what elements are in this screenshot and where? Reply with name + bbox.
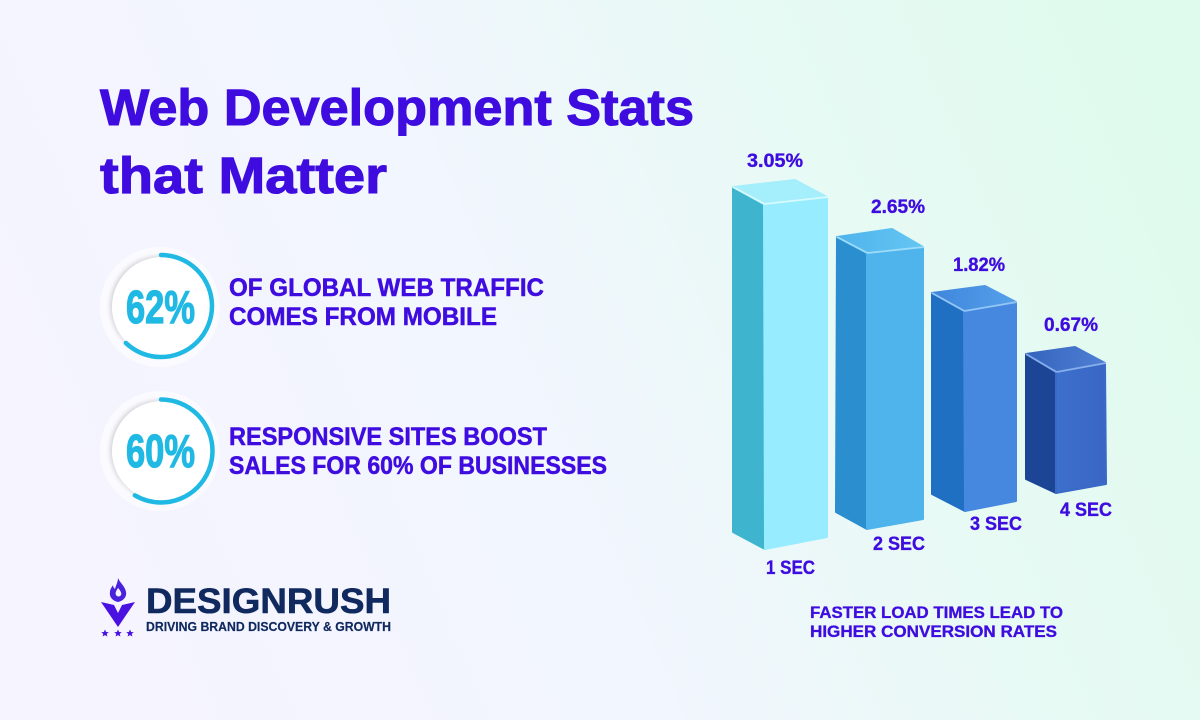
value: 1.82% (953, 255, 1005, 276)
chart caption: HIGHER CONVERSION RATES (810, 622, 1057, 641)
value: 2.65% (871, 197, 925, 218)
axis label: 1 SEC (766, 558, 815, 579)
stat text: RESPONSIVE SITES BOOST (229, 423, 547, 451)
chart caption: FASTER LOAD TIMES LEAD TO (810, 603, 1063, 622)
value: 3.05% (747, 151, 803, 172)
bar: 4 sec (1026, 315, 1112, 521)
donut: 60%: 60% (126, 425, 195, 477)
axis label: 2 SEC (873, 534, 925, 555)
donut: 62% (100, 247, 220, 367)
stat: 60% responsive sites (100, 391, 607, 511)
bar: 2 sec (836, 197, 925, 555)
stat text (229, 274, 544, 331)
chart caption (810, 603, 1063, 641)
bar: 1 sec (733, 151, 828, 579)
stat text (229, 423, 607, 480)
stat text: OF GLOBAL WEB TRAFFIC (229, 274, 544, 302)
icon: flame and V with stars (101, 578, 135, 636)
axis label: 4 SEC (1060, 500, 1112, 521)
tagline: DRIVING BRAND DISCOVERY & GROWTH (146, 620, 391, 634)
stat: 62% mobile traffic (100, 247, 544, 367)
stat text: COMES FROM MOBILE (229, 303, 497, 331)
bar: 3 sec (932, 255, 1022, 535)
value: 0.67% (1044, 315, 1098, 336)
donut: 60% (100, 391, 220, 511)
wordmark: DESIGNRUSH (146, 582, 391, 621)
donut: 62%: 62% (126, 281, 195, 333)
title (100, 79, 694, 204)
title: that Matter (100, 147, 387, 204)
title: Web Development Stats (100, 79, 694, 136)
logo: DesignRush (101, 578, 391, 636)
axis label: 3 SEC (970, 514, 1022, 535)
stat text: SALES FOR 60% OF BUSINESSES (229, 452, 607, 480)
bar chart: conversion rate by load time (733, 151, 1112, 579)
